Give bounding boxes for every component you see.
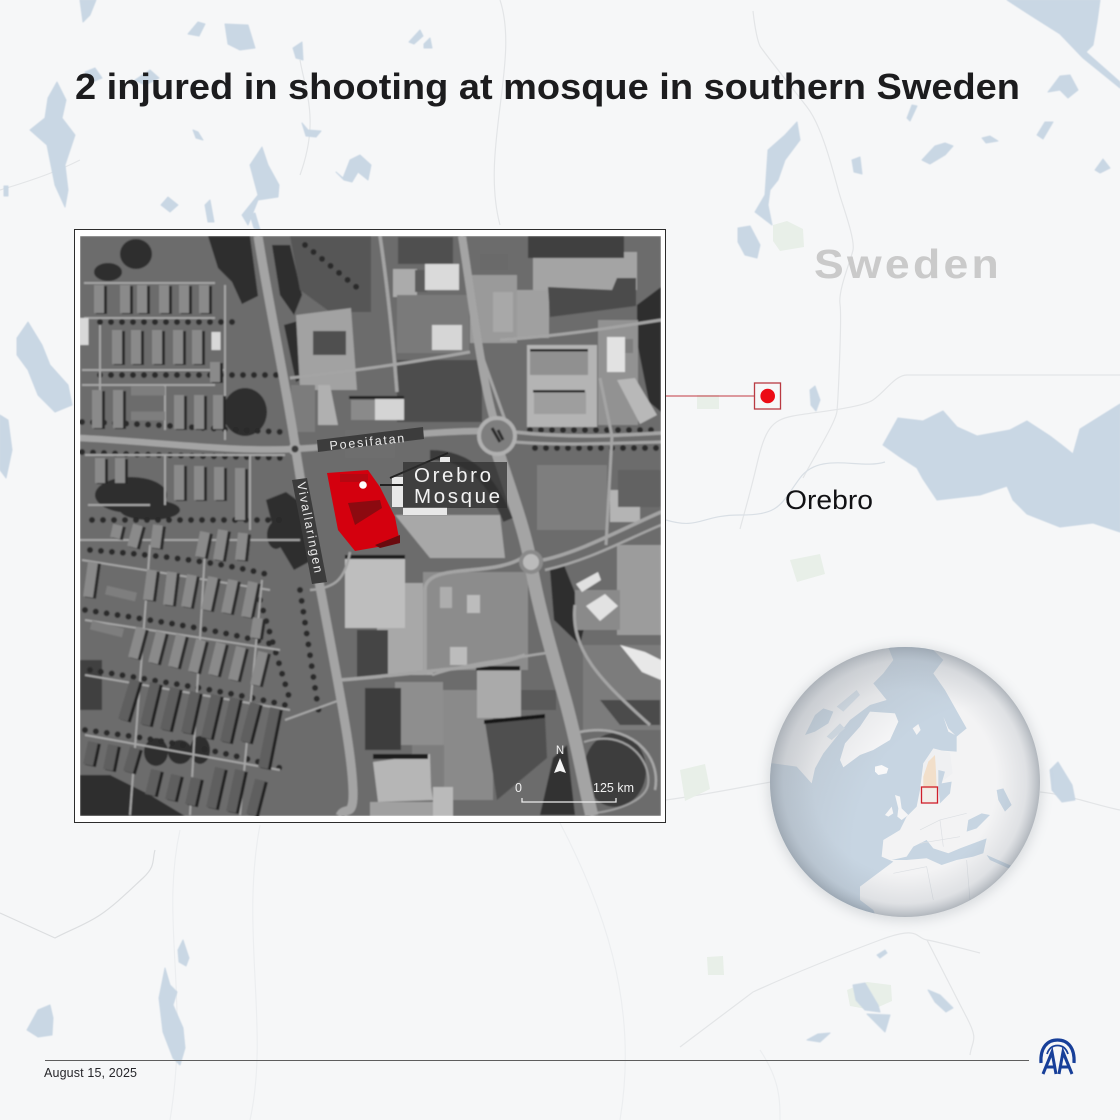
Sweden xyxy=(923,755,937,788)
scale bar: 125 km xyxy=(593,781,634,795)
Mediterranean xyxy=(892,838,987,865)
map green patches xyxy=(680,221,892,1010)
street label band: Poesifatan xyxy=(317,427,424,453)
scale bar: 0 xyxy=(515,781,522,795)
paved lots xyxy=(291,252,661,800)
locator square xyxy=(922,787,938,803)
mosque label band xyxy=(380,453,507,515)
globe shading xyxy=(770,647,1040,917)
icon: AA logo xyxy=(1041,1040,1074,1074)
title: 2 injured in shooting at mosque in southern Sweden xyxy=(75,66,1020,107)
roads xyxy=(80,236,661,816)
globe borders xyxy=(893,813,970,900)
satellite map panel xyxy=(74,230,666,822)
Iceland xyxy=(875,765,888,775)
street label band: Poesifatan: Poesifatan xyxy=(329,431,405,453)
highlighted mosque site xyxy=(327,470,400,551)
globe ocean xyxy=(767,643,967,927)
Arctic islands xyxy=(913,717,955,735)
connector line to location marker xyxy=(666,395,755,397)
shadows and houses xyxy=(84,285,278,816)
footer rule xyxy=(45,1060,1029,1062)
mosque label band: Orebro xyxy=(414,464,491,487)
locator globe xyxy=(767,643,1042,927)
residential roads xyxy=(80,283,340,815)
tree cover xyxy=(80,236,661,816)
Hudson Bay xyxy=(805,708,833,735)
Baltic xyxy=(938,770,952,803)
dark oval and verge xyxy=(540,700,660,815)
street label band: Vivallaringen: Vivallaringen xyxy=(294,481,325,574)
location marker xyxy=(754,383,780,409)
roundabouts xyxy=(290,418,541,572)
Canadian archipelago channels xyxy=(827,690,860,740)
north arrow xyxy=(554,745,566,773)
commercial buildings xyxy=(313,236,661,816)
Caspian and Black seas xyxy=(967,788,1012,832)
date: August 15, 2025 xyxy=(44,1066,137,1080)
Scandinavia xyxy=(924,748,941,763)
Greenland xyxy=(840,712,898,767)
scale bar xyxy=(515,781,634,802)
mosque label band: Mosque xyxy=(414,485,500,508)
tree rows xyxy=(82,245,660,768)
country label: Sweden: Sweden xyxy=(814,241,1002,287)
Red Sea xyxy=(987,855,1013,868)
Britain and Ireland xyxy=(885,795,908,820)
field north xyxy=(290,236,371,312)
city label: Orebro: Orebro xyxy=(785,485,873,515)
north arrow: N xyxy=(556,745,564,757)
